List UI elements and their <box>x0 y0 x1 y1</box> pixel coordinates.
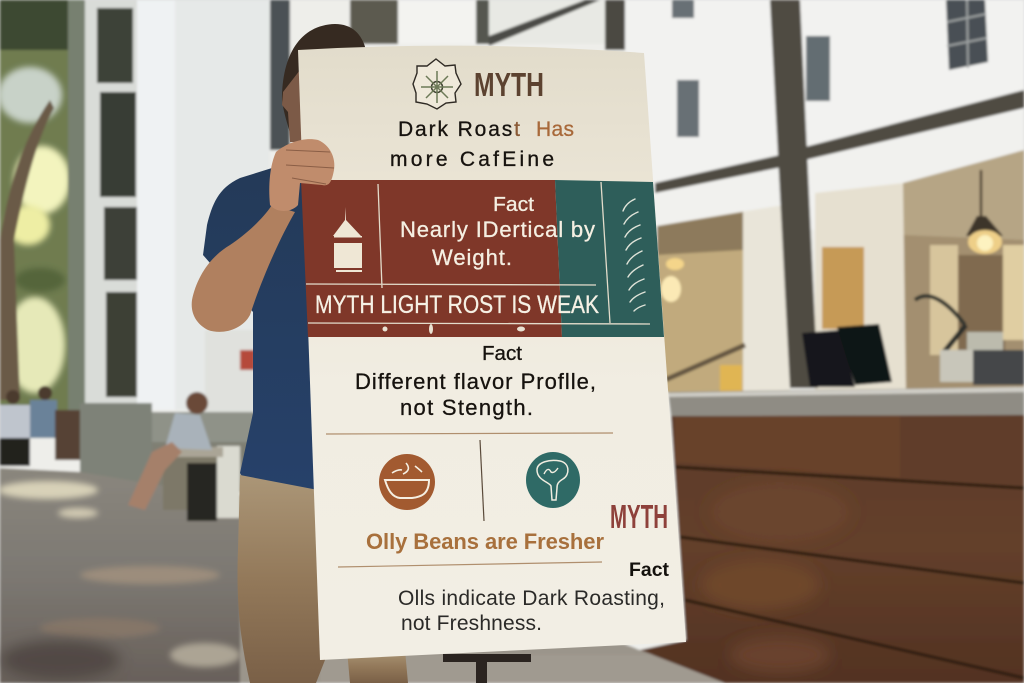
fact three text: not Freshness. <box>401 612 542 635</box>
navy shirt <box>203 168 330 491</box>
stone counter top <box>668 387 1024 416</box>
white frames, dark window panes and columns <box>68 0 270 492</box>
hand gripping poster <box>269 139 334 211</box>
far passers-by <box>0 386 80 466</box>
icon: sun emblem <box>413 59 461 109</box>
fact two text: Different flavor Proflle, <box>355 369 596 394</box>
icon: teal spoon <box>526 452 580 508</box>
person behind poster <box>192 24 408 683</box>
chairs and counter items <box>802 296 1024 387</box>
dark window mullions <box>655 0 1024 388</box>
fact text: Nearly IDertical by <box>400 217 595 242</box>
cafe interior <box>657 150 1024 392</box>
fact text: Fact <box>493 194 534 216</box>
fact text <box>400 194 595 270</box>
fact three text: Fact <box>629 560 670 581</box>
small bean dots <box>382 324 525 334</box>
myth one statement <box>390 118 574 171</box>
patio pavement <box>0 468 720 683</box>
fact two text: not Stength. <box>400 395 533 420</box>
hair and face <box>282 24 366 140</box>
icon: feather strokes <box>623 199 645 311</box>
pendant lamp <box>966 170 1003 254</box>
myth three label: MYTH <box>610 498 668 535</box>
fact two text <box>355 343 596 420</box>
board surface <box>298 46 686 660</box>
myth two statement: MYTH LIGHT ROST IS WEAK <box>315 291 599 319</box>
myth heading: MYTH <box>474 66 544 103</box>
header: myth icon and label <box>413 59 544 109</box>
top windows behind poster <box>270 0 627 150</box>
trees on the left <box>0 0 72 410</box>
teal section <box>555 180 664 337</box>
icon: steaming coffee cup <box>379 454 435 510</box>
red section <box>301 180 562 337</box>
myth one statement: more CafEine <box>390 148 554 171</box>
white facade on the right <box>625 0 1024 230</box>
khaki trousers <box>238 475 408 683</box>
white band under mullions <box>655 110 1024 226</box>
panel: fact band <box>301 180 664 337</box>
fact three text <box>398 560 670 635</box>
band lines <box>306 182 650 324</box>
wood counter <box>640 415 1024 683</box>
arm <box>192 205 295 332</box>
icon: coffee bottle <box>333 207 362 272</box>
easel stand <box>443 654 531 683</box>
myth one statement: Dark Roast <box>398 118 520 141</box>
myth one statement: Has <box>536 118 574 141</box>
fact three text: Olls indicate Dark Roasting, <box>398 587 665 610</box>
seated person and bench <box>128 392 240 521</box>
myth three statement: Olly Beans are Fresher <box>366 529 604 554</box>
fact text: Weight. <box>432 245 512 270</box>
poster board <box>298 46 686 660</box>
fact two text: Fact <box>482 343 522 365</box>
